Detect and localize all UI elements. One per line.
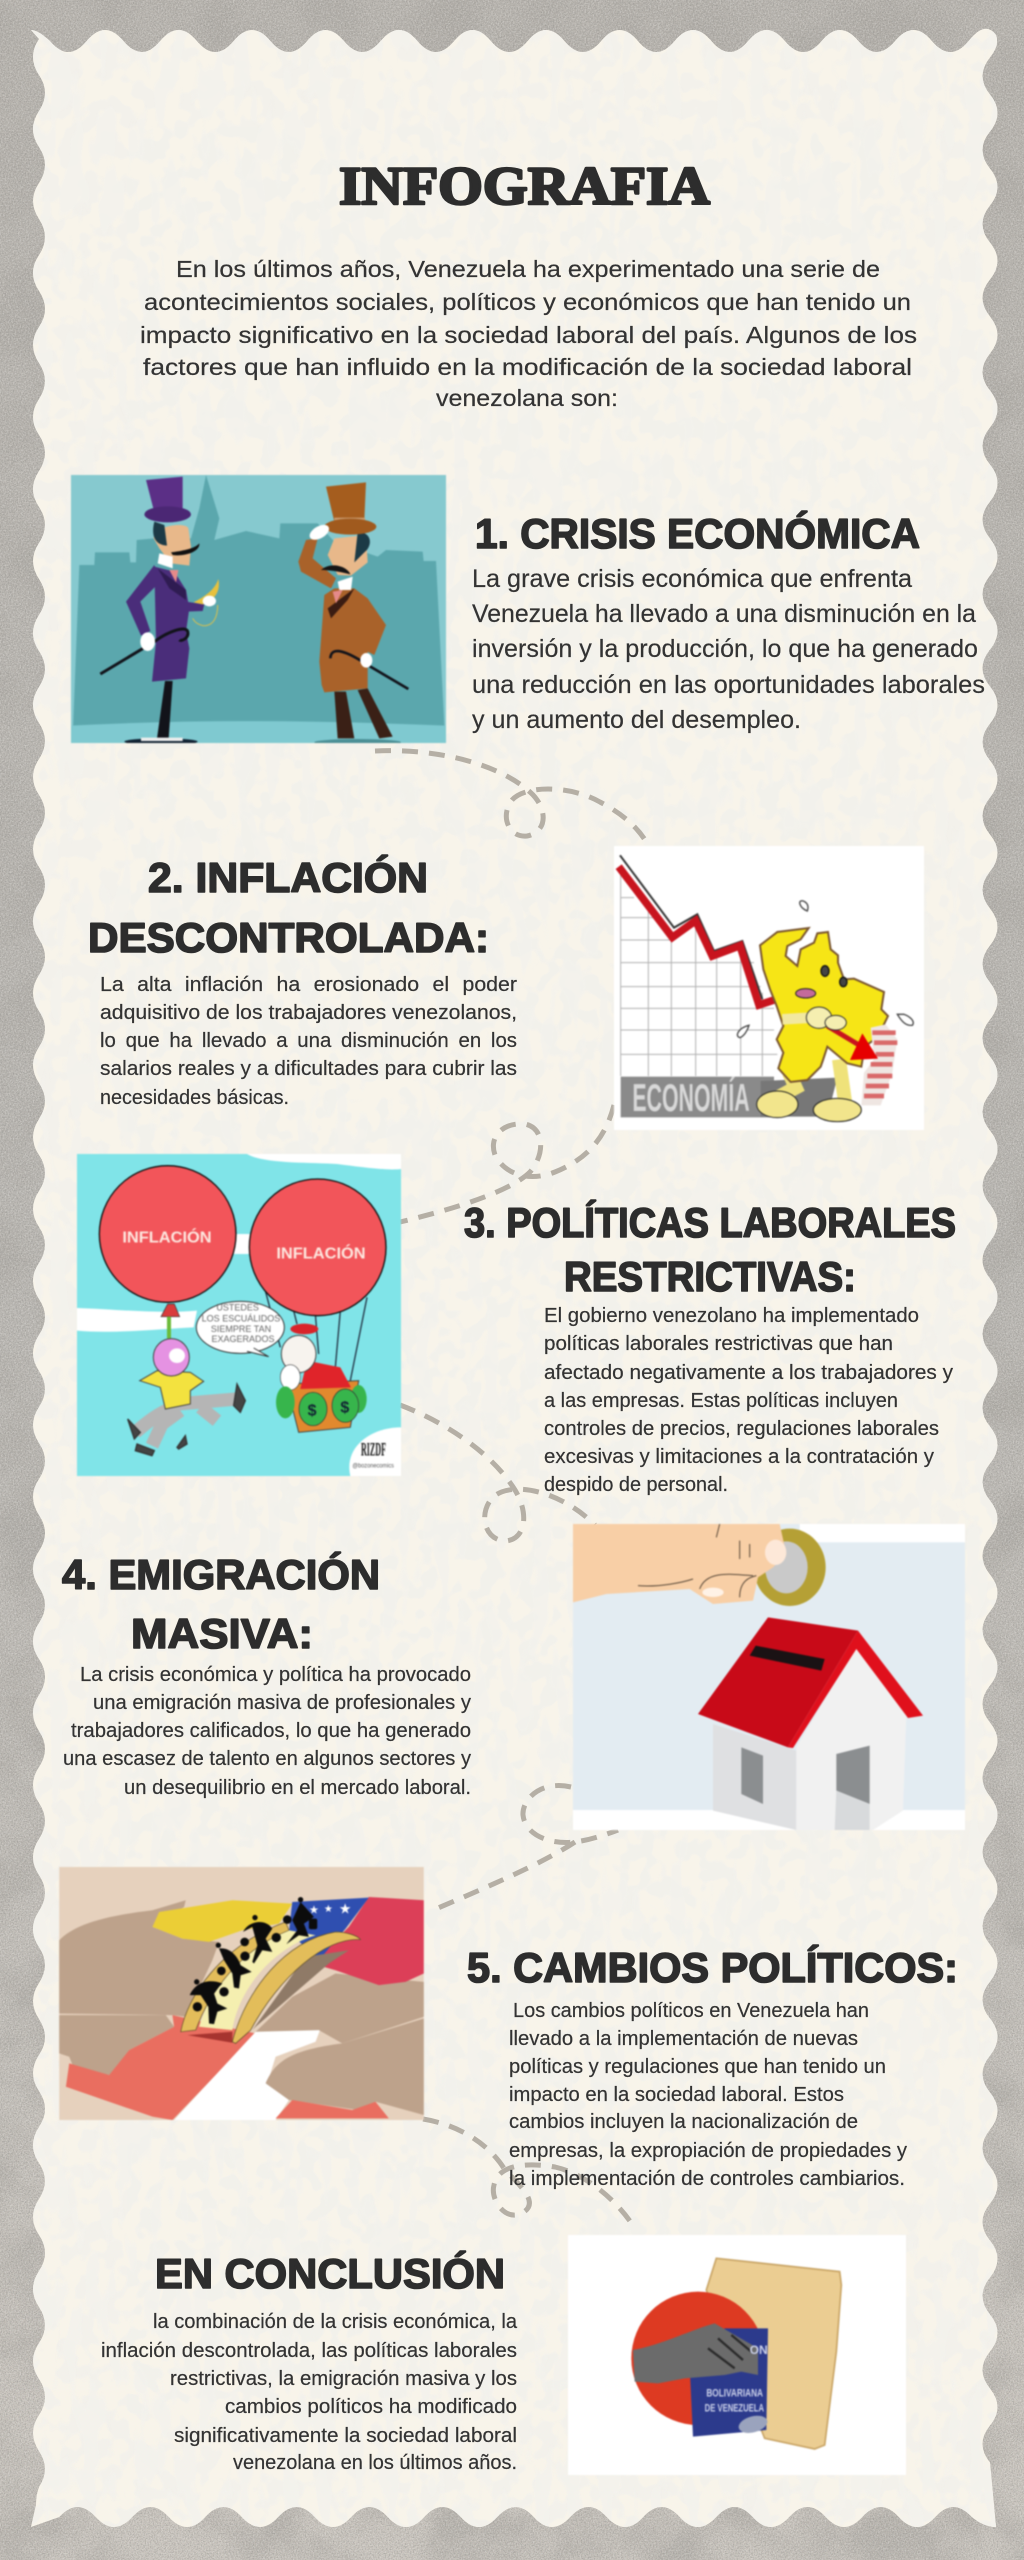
image: hand holding Venezuelan constitution [568,2235,906,2475]
text: politicas laborales: a las empresas. Estas políticas incluyen [544,1390,898,1412]
text: emigracion: La crisis económica y política ha provocado [80,1664,471,1686]
title: INFOGRAFIA [339,156,710,216]
dashed connector: image 4 to image 5 [431,1786,618,1911]
text: crisis economica: La grave crisis económica que enfrenta [472,565,912,593]
image: economia falling chart cartoon [614,846,924,1130]
heading: 3. politicas laborales restrictivas: 3. POLÍTICAS LABORALES [464,1199,956,1246]
dashed connector: image 5 to image 6 [423,2119,634,2227]
text: conclusion: significativamente la sociedad laboral [174,2425,517,2447]
text: emigracion: una emigración masiva de profesionales y [93,1692,471,1714]
text: conclusion: venezolana en los últimos años. [233,2452,517,2474]
image: inflation balloons cartoon: SIEMPRE TAN [211,1324,271,1334]
text: conclusion: restrictivas, la emigración masiva y los [170,2368,517,2390]
text: crisis economica: una reducción en las oportunidades laborales [472,671,985,699]
heading: 4. emigracion masiva: MASIVA: [131,1610,313,1657]
text: inflacion: La alta inflación ha erosionado el poder [100,974,517,996]
text: inflacion: adquisitivo de los trabajadores venezolanos, [100,1002,517,1024]
text: emigracion [63,1664,471,1799]
image: two top-hat gentlemen [71,475,446,746]
text: conclusion: cambios políticos ha modificado [225,2396,517,2418]
heading: en conclusion: EN CONCLUSIÓN [155,2249,505,2297]
text: emigracion: un desequilibrio en el mercado laboral. [124,1777,471,1799]
image: hand holding Venezuelan constitution: BOLIVARIANA [706,2387,763,2399]
text: cambios politicos: la implementación de controles cambiarios. [509,2168,905,2190]
image: economia falling chart cartoon: ECONOMÍA [632,1076,750,1120]
intro paragraph: factores que han influido en la modificación de la sociedad laboral [143,354,912,380]
text: emigracion: trabajadores calificados, lo que ha generado [71,1720,471,1742]
image: migrants crossing bridge on map [59,1867,424,2120]
text: inflacion: lo que ha llevado a una disminución en los [100,1030,517,1052]
intro paragraph: venezolana son: [436,385,618,411]
image: inflation balloons cartoon: LOS ESCUÁLIDOS [202,1314,280,1324]
text: inflacion: necesidades básicas. [100,1087,289,1109]
text: politicas laborales: afectado negativamente a los trabajadores y [544,1362,953,1384]
image: hand holding Venezuelan constitution: DE VENEZUELA [705,2403,764,2415]
image: inflation balloons cartoon: @bozonecomics [352,1462,395,1469]
heading: 1. crisis economica: 1. CRISIS ECONÓMICA [475,509,920,557]
intro paragraph: En los últimos años, Venezuela ha experimentado una serie de [176,256,880,282]
text: crisis economica: y un aumento del desempleo. [472,706,801,734]
text: emigracion: una escasez de talento en algunos sectores y [63,1748,471,1770]
intro paragraph: acontecimientos sociales, políticos y económicos que han tenido un [144,289,911,315]
image: hand holding Venezuelan constitution: ON [750,2343,768,2357]
heading: 4. emigracion masiva: 4. EMIGRACIÓN [62,1550,380,1598]
image: inflation balloons cartoon [77,1154,401,1476]
text: inflacion [100,974,517,1109]
image: migrants crossing bridge on map: ★ [339,1902,351,1918]
heading: 2. inflacion descontrolada: 2. INFLACIÓN [148,853,428,901]
text: cambios politicos: empresas, la expropiación de propiedades y [509,2140,907,2162]
text: crisis economica: Venezuela ha llevado a una disminución en la [472,600,976,628]
text: cambios politicos: llevado a la implementación de nuevas [509,2028,858,2050]
text: politicas laborales: políticas laborales restrictivas que han [544,1333,893,1355]
text: cambios politicos: Los cambios políticos en Venezuela han [513,2000,869,2022]
text: politicas laborales: controles de precios, regulaciones laborales [544,1418,939,1440]
heading: 4. emigracion masiva [62,1550,380,1657]
text: conclusion [101,2311,518,2474]
text: crisis economica [472,565,985,734]
image: coin into house piggy bank [573,1524,965,1830]
dashed connector: image 3 to image 4 [400,1405,595,1541]
text: politicas laborales [544,1305,953,1496]
text: politicas laborales: despido de personal. [544,1474,728,1496]
text: politicas laborales: El gobierno venezolano ha implementado [544,1305,919,1327]
text: politicas laborales: excesivas y limitaciones a la contratación y [544,1446,934,1468]
image: inflation balloons cartoon: INFLACIÓN [122,1229,212,1247]
dashed connector: image 1 to image 2 [375,751,648,845]
image: inflation balloons cartoon: USTEDES [216,1303,259,1313]
heading: 3. politicas laborales restrictivas: RESTRICTIVAS: [564,1253,856,1300]
dashed connector: image 2 to image 3 [400,1105,614,1222]
intro paragraph [140,256,917,411]
heading: 2. inflacion descontrolada [88,853,489,961]
heading: 2. inflacion descontrolada: DESCONTROLADA: [88,914,489,961]
text: conclusion: la combinación de la crisis económica, la [153,2311,518,2333]
image: inflation balloons cartoon: $ [340,1399,349,1416]
image: inflation balloons cartoon: EXAGERADOS [211,1334,275,1344]
text: cambios politicos: impacto en la sociedad laboral. Estos [509,2084,844,2106]
image: migrants crossing bridge on map: ★ [324,1904,333,1915]
image: inflation balloons cartoon: $ [308,1403,317,1420]
intro paragraph: impacto significativo en la sociedad laboral del país. Algunos de los [140,322,917,348]
text: crisis economica: inversión y la producción, lo que ha generado [472,635,978,663]
text: cambios politicos: políticas y regulaciones que han tenido un [509,2056,886,2078]
text: conclusion: inflación descontrolada, las políticas laborales [101,2340,517,2362]
text: cambios politicos [509,2000,907,2190]
text: inflacion: salarios reales y a dificultades para cubrir las [100,1058,517,1080]
heading: 5. cambios politicos: 5. CAMBIOS POLÍTICOS: [467,1944,958,1991]
image: inflation balloons cartoon: INFLACIÓN [276,1245,366,1263]
heading: 3. politicas laborales restrictivas [464,1199,956,1300]
text: cambios politicos: cambios incluyen la nacionalización de [509,2111,858,2133]
image: migrants crossing bridge on map: ★ [309,1904,319,1917]
